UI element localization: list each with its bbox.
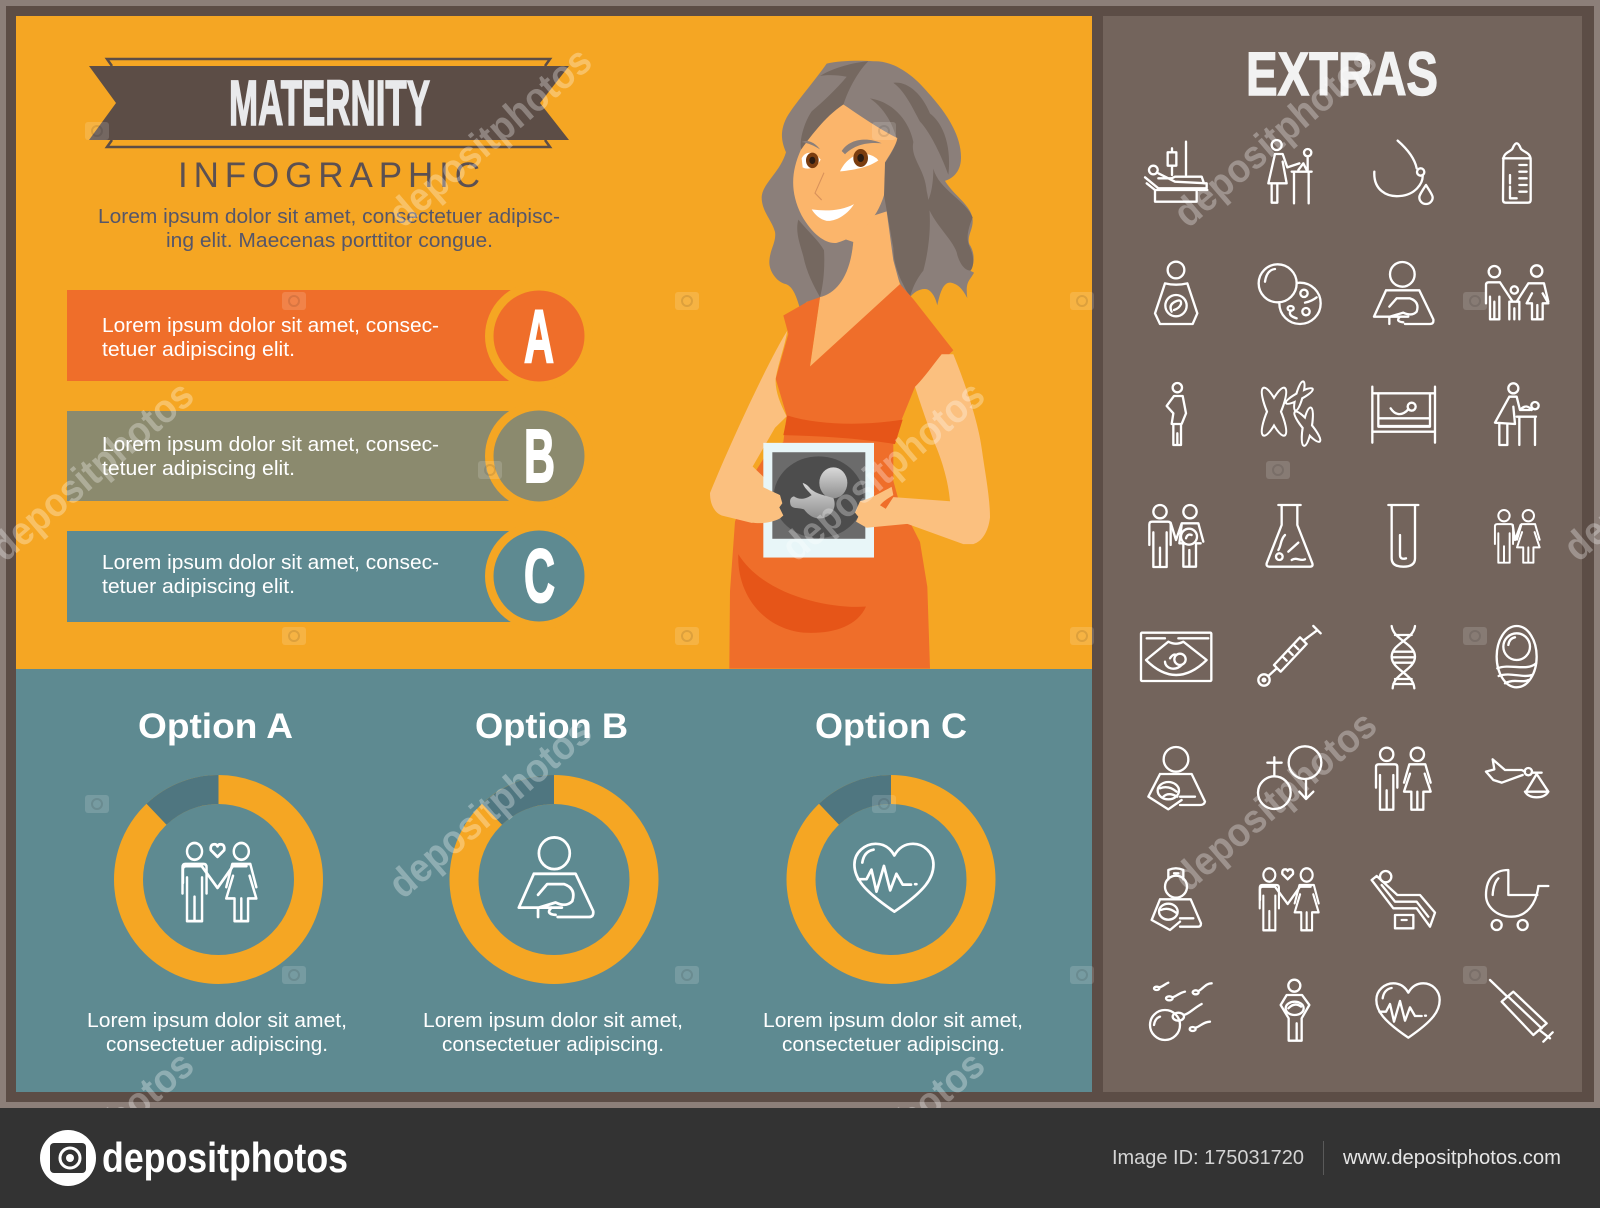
icon: chromosomes bbox=[1258, 381, 1323, 446]
title ribbon bbox=[89, 59, 569, 147]
option captions: consectetuer adipiscing. bbox=[442, 1034, 664, 1056]
icon: couple with heart bbox=[183, 843, 256, 921]
option headings bbox=[138, 707, 967, 746]
icon: baby stroller bbox=[1486, 870, 1548, 930]
icon: baby bottle bbox=[1503, 143, 1531, 203]
nose and mouth bbox=[815, 173, 824, 200]
icon: breast milk bbox=[1374, 141, 1433, 204]
donut C bbox=[801, 790, 981, 970]
icon: long syringe bbox=[1490, 980, 1553, 1042]
option bar A: Lorem ipsum dolor sit amet, consec- bbox=[102, 315, 439, 337]
dress bbox=[729, 284, 953, 669]
option captions: consectetuer adipiscing. bbox=[106, 1034, 328, 1056]
panel: extras bbox=[1103, 16, 1582, 1092]
intro text: Lorem ipsum dolor sit amet, consectetuer adipisc- bbox=[98, 206, 560, 228]
icon: heart pulse bbox=[1376, 983, 1440, 1038]
option bar C bbox=[67, 522, 593, 630]
icon: couple expecting bbox=[1149, 505, 1203, 567]
footer image id: Image ID: 175031720 bbox=[1112, 1147, 1304, 1169]
subtitle: INFOGRAPHIC bbox=[178, 156, 480, 195]
watermarks: depositphotos bbox=[380, 709, 600, 907]
arms bbox=[710, 331, 787, 523]
option headings: Option B bbox=[475, 707, 628, 746]
icon: pregnant woman with fetus bbox=[1155, 262, 1197, 324]
watermarks: depositphotos bbox=[1165, 702, 1385, 900]
icon: baby crib bbox=[1372, 387, 1435, 443]
icon: couple bbox=[1495, 510, 1540, 563]
option bar B: Lorem ipsum dolor sit amet, consec- bbox=[102, 434, 439, 456]
option bar A: tetuer adipiscing elit. bbox=[102, 339, 295, 361]
extras heading: EXTRAS bbox=[1246, 40, 1438, 108]
option bar C: C bbox=[524, 534, 555, 618]
icon: man and woman bbox=[1376, 748, 1431, 810]
icon: mother nursing baby bbox=[1374, 262, 1433, 324]
icon: heart pulse bbox=[854, 844, 933, 912]
option bar C: Lorem ipsum dolor sit amet, consec- bbox=[102, 552, 439, 574]
icon: egg cells bbox=[1259, 264, 1321, 324]
icon: ultrasound screen bbox=[1141, 633, 1211, 681]
eyes and brows bbox=[802, 140, 882, 171]
option bar B: B bbox=[524, 414, 555, 498]
icon: mother at table bbox=[1268, 140, 1312, 203]
dress belt bbox=[783, 416, 903, 444]
footer logo: depositphotos bbox=[102, 1134, 348, 1181]
intro text bbox=[98, 206, 560, 252]
hair bbox=[762, 61, 974, 314]
icon: pregnant silhouette bbox=[1167, 383, 1186, 445]
intro text: ing elit. Maecenas porttitor congue. bbox=[166, 230, 493, 252]
icon: test tube bbox=[1388, 505, 1418, 567]
icon grid: extras rows 1-4 bbox=[1145, 140, 1548, 567]
illustration: pregnant woman holding ultrasound bbox=[710, 61, 990, 669]
option captions: Lorem ipsum dolor sit amet, bbox=[423, 1010, 683, 1032]
watermark camera marks bbox=[85, 122, 1487, 984]
option captions: Lorem ipsum dolor sit amet, bbox=[763, 1010, 1023, 1032]
option captions: consectetuer adipiscing. bbox=[782, 1034, 1005, 1056]
donut B bbox=[464, 790, 644, 970]
dress fold bbox=[738, 554, 866, 633]
icon: couple with heart bbox=[1260, 868, 1319, 930]
ultrasound photo bbox=[763, 443, 874, 558]
watermarks: depositphotos bbox=[773, 372, 993, 570]
icon: mother nursing bbox=[519, 837, 593, 917]
option captions: Lorem ipsum dolor sit amet, bbox=[87, 1010, 347, 1032]
hands on photo bbox=[747, 477, 910, 528]
panel: orange header area bbox=[16, 16, 1092, 669]
option headings: Option A bbox=[138, 707, 293, 746]
footer bar bbox=[0, 1108, 1600, 1208]
icon: swaddled baby bbox=[1497, 626, 1537, 687]
neck bbox=[810, 211, 900, 367]
option headings: Option C bbox=[815, 707, 967, 746]
face bbox=[793, 104, 897, 243]
icon: stork with bundle bbox=[1486, 759, 1548, 797]
option bar C: tetuer adipiscing elit. bbox=[102, 576, 295, 598]
donut A bbox=[128, 790, 308, 970]
icon: woman holding baby bbox=[1281, 980, 1309, 1041]
icon: lab flask bbox=[1267, 505, 1313, 567]
icon: mother with baby bbox=[1148, 747, 1205, 809]
watermarks: depositphotos bbox=[380, 38, 600, 236]
icon: sperm and egg bbox=[1150, 983, 1212, 1040]
watermarks: depositphotos bbox=[1165, 38, 1385, 236]
title: maternity: MATERNITY bbox=[229, 67, 430, 139]
option bar B bbox=[67, 402, 593, 510]
icon: syringe bbox=[1258, 626, 1321, 686]
footer logo bbox=[40, 1130, 348, 1186]
option bar A bbox=[67, 282, 593, 390]
icon: gender symbols bbox=[1258, 746, 1321, 809]
icon: changing baby bbox=[1495, 383, 1539, 445]
panel: teal options area bbox=[16, 669, 1092, 1092]
option bar B: tetuer adipiscing elit. bbox=[102, 458, 295, 480]
option bar A: A bbox=[524, 294, 554, 378]
icon grid: extras rows 5-8 bbox=[1141, 626, 1553, 1042]
icon: hospital bed bbox=[1145, 142, 1207, 202]
icon: medical chair bbox=[1372, 871, 1435, 928]
option captions bbox=[87, 1010, 1023, 1056]
icon: family bbox=[1486, 265, 1548, 319]
footer url: www.depositphotos.com bbox=[1342, 1147, 1561, 1169]
icon: dna bbox=[1392, 626, 1415, 688]
hair shadows bbox=[797, 61, 973, 297]
icon: nurse with baby bbox=[1152, 868, 1201, 930]
